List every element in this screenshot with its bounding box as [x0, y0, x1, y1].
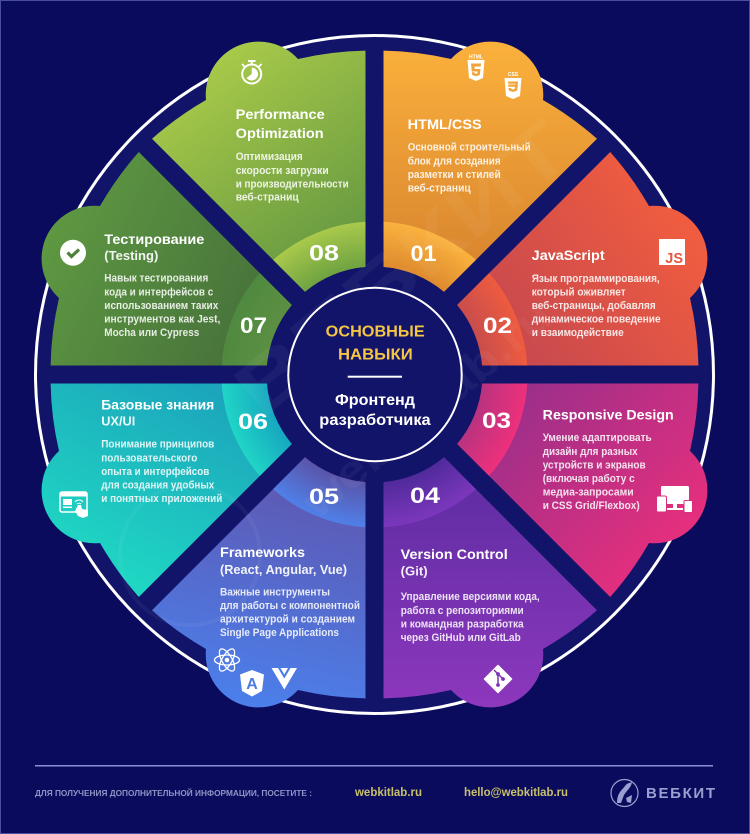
heading Базовые знания: Базовые знания	[101, 396, 214, 412]
description 07: кода и интерфейсов с	[104, 286, 213, 298]
description 08: Оптимизация	[236, 151, 303, 163]
panel: 08 Performance	[152, 42, 366, 292]
description 01: Основной строительный	[408, 142, 531, 154]
icon: stopwatch	[242, 60, 262, 84]
watermark	[120, 104, 587, 625]
number 04: 04	[410, 483, 441, 508]
segment shape 02	[457, 152, 707, 366]
number band 06	[222, 384, 292, 476]
description 04: через GitHub или GitLab	[401, 632, 521, 644]
description 02: Язык программирования,	[532, 273, 660, 285]
icon: check circle	[60, 240, 86, 266]
description 03: Умение адаптировать	[543, 432, 652, 444]
footer email link: hello@webkitlab.ru	[464, 787, 568, 799]
panel: 07 Testing	[42, 152, 292, 366]
center subtitle: Фронтенд	[335, 392, 415, 409]
panel: 05 Frameworks	[152, 457, 366, 707]
number band 07	[222, 273, 292, 366]
icon: Vue	[272, 668, 297, 690]
description 05: Single Page Applications	[220, 627, 339, 639]
number band 05	[273, 457, 366, 527]
heading HTML/CSS: HTML/CSS	[408, 116, 482, 132]
description 07: Навык тестирования	[104, 273, 208, 285]
segment shape 03	[457, 384, 707, 597]
center title: ОСНОВНЫЕ	[326, 324, 425, 341]
panel: 01 HTML/CSS	[384, 42, 597, 292]
description 03	[543, 432, 652, 512]
center divider	[348, 376, 402, 378]
heading Тестирование: Тестирование	[104, 231, 205, 247]
description 07: Mocha или Cypress	[104, 327, 199, 339]
description 03: устройств и экранов	[543, 460, 646, 472]
footer divider	[35, 765, 713, 766]
number band 02	[457, 273, 527, 366]
heading Frameworks: Frameworks	[220, 544, 305, 560]
number 05: 05	[309, 484, 339, 509]
center circle	[288, 288, 462, 461]
center title: НАВЫКИ	[338, 346, 413, 363]
heading Responsive Design: Responsive Design	[543, 406, 674, 422]
subheading Testing: (Testing)	[104, 249, 158, 263]
icon: JS	[659, 239, 685, 267]
description 08: скорости загрузки	[236, 165, 329, 177]
number 08: 08	[309, 241, 339, 266]
description 07: использованием таких	[104, 300, 218, 312]
description 05: архитектурой и созданием	[220, 614, 355, 626]
heading Performance Optimization: Optimization	[236, 125, 324, 141]
description 04: Управление версиями кода,	[401, 591, 540, 603]
center title	[326, 324, 425, 363]
icon: HTML5 shield: HTML	[469, 54, 483, 60]
footer logo	[611, 780, 715, 806]
outer white ring disc	[36, 36, 714, 714]
segment shape 06	[42, 384, 292, 597]
panel: 03 Responsive Design	[457, 384, 707, 597]
segment shape 04	[384, 457, 597, 707]
number 01: 01	[410, 241, 436, 266]
subheading UX/UI: UX/UI	[101, 415, 135, 429]
description 06	[101, 439, 222, 505]
number 03: 03	[482, 408, 511, 433]
description 08: и производительности	[236, 178, 349, 190]
description 03: медиа-запросами	[543, 486, 634, 498]
description 05: для работы с компонентной	[220, 600, 360, 612]
description 06: опыта и интерфейсов	[101, 466, 210, 478]
segment shape 08	[152, 42, 366, 292]
number band 08	[273, 222, 366, 292]
number 07: 07	[240, 313, 267, 338]
footer note: ДЛЯ ПОЛУЧЕНИЯ ДОПОЛНИТЕЛЬНОЙ ИНФОРМАЦИИ, ПОСЕТИТЕ :	[35, 787, 312, 798]
description 07	[104, 273, 220, 339]
subheading Git: (Git)	[401, 565, 428, 579]
segment shape 07	[42, 152, 292, 366]
description 01: веб-страниц	[408, 183, 471, 195]
description 04: и командная разработка	[401, 618, 525, 630]
panel: 02 JavaScript	[457, 152, 707, 366]
icon: web interface click	[60, 492, 88, 518]
segment shape 05	[152, 457, 366, 707]
icon: React	[214, 647, 240, 673]
description 05	[220, 586, 360, 639]
icon: JS: JS	[665, 251, 683, 267]
description 08: веб-страниц	[236, 192, 299, 204]
footer website link: webkitlab.ru	[354, 787, 422, 799]
description 02: который оживляет	[532, 286, 626, 298]
watermark: ВЕБКИТ	[218, 104, 587, 433]
description 01: разметки и стилей	[408, 169, 501, 181]
description 03: (включая работу с	[543, 473, 635, 485]
heading Performance Optimization: Performance	[236, 106, 325, 122]
description 08	[236, 151, 349, 204]
description 02: динамическое поведение	[532, 314, 661, 326]
description 01: блок для создания	[408, 156, 501, 168]
icon: CSS3 shield: CSS	[508, 72, 519, 78]
watermark: webkitlab.ru	[290, 289, 562, 528]
number 02: 02	[483, 313, 512, 338]
segment shape 01	[384, 42, 597, 292]
subheading frameworks list: (React, Angular, Vue)	[220, 563, 347, 577]
icon: HTML5 shield	[468, 54, 484, 81]
center subtitle	[319, 392, 431, 429]
icon: Angular: A	[246, 676, 258, 693]
description 02	[532, 273, 661, 339]
center subtitle: разработчика	[319, 412, 431, 429]
number band 01	[384, 222, 476, 292]
description 07: инструментов как Jest,	[104, 314, 220, 326]
number band 04	[384, 457, 476, 527]
icon: CSS3 shield	[504, 72, 522, 99]
panel: 04 Version Control	[384, 457, 597, 707]
heading Performance Optimization	[236, 106, 325, 141]
description 06: и понятных приложений	[101, 493, 222, 505]
number 06: 06	[238, 409, 268, 434]
heading Version Control: Version Control	[401, 546, 508, 562]
description 04: работа с репозиториями	[401, 605, 524, 617]
description 03: и CSS Grid/Flexbox)	[543, 500, 640, 512]
description 06: пользовательского	[101, 452, 198, 464]
description 05: Важные инструменты	[220, 586, 330, 598]
icon: git diamond	[484, 666, 512, 692]
heading JavaScript: JavaScript	[532, 247, 605, 263]
description 01	[408, 142, 531, 195]
icon: devices	[656, 486, 692, 512]
icon: Angular	[240, 670, 264, 696]
description 02: и взаимодействие	[532, 327, 624, 339]
footer logo: ВЕБКИТ	[646, 785, 715, 802]
panel: 06 UX/UI	[42, 384, 292, 597]
description 02: веб-страницы, добавляя	[532, 300, 656, 312]
description 06: Понимание принципов	[101, 439, 215, 451]
description 03: дизайн для разных	[543, 446, 638, 458]
number band 03	[457, 384, 527, 476]
description 06: для создания удобных	[101, 480, 214, 492]
description 04	[401, 591, 540, 644]
